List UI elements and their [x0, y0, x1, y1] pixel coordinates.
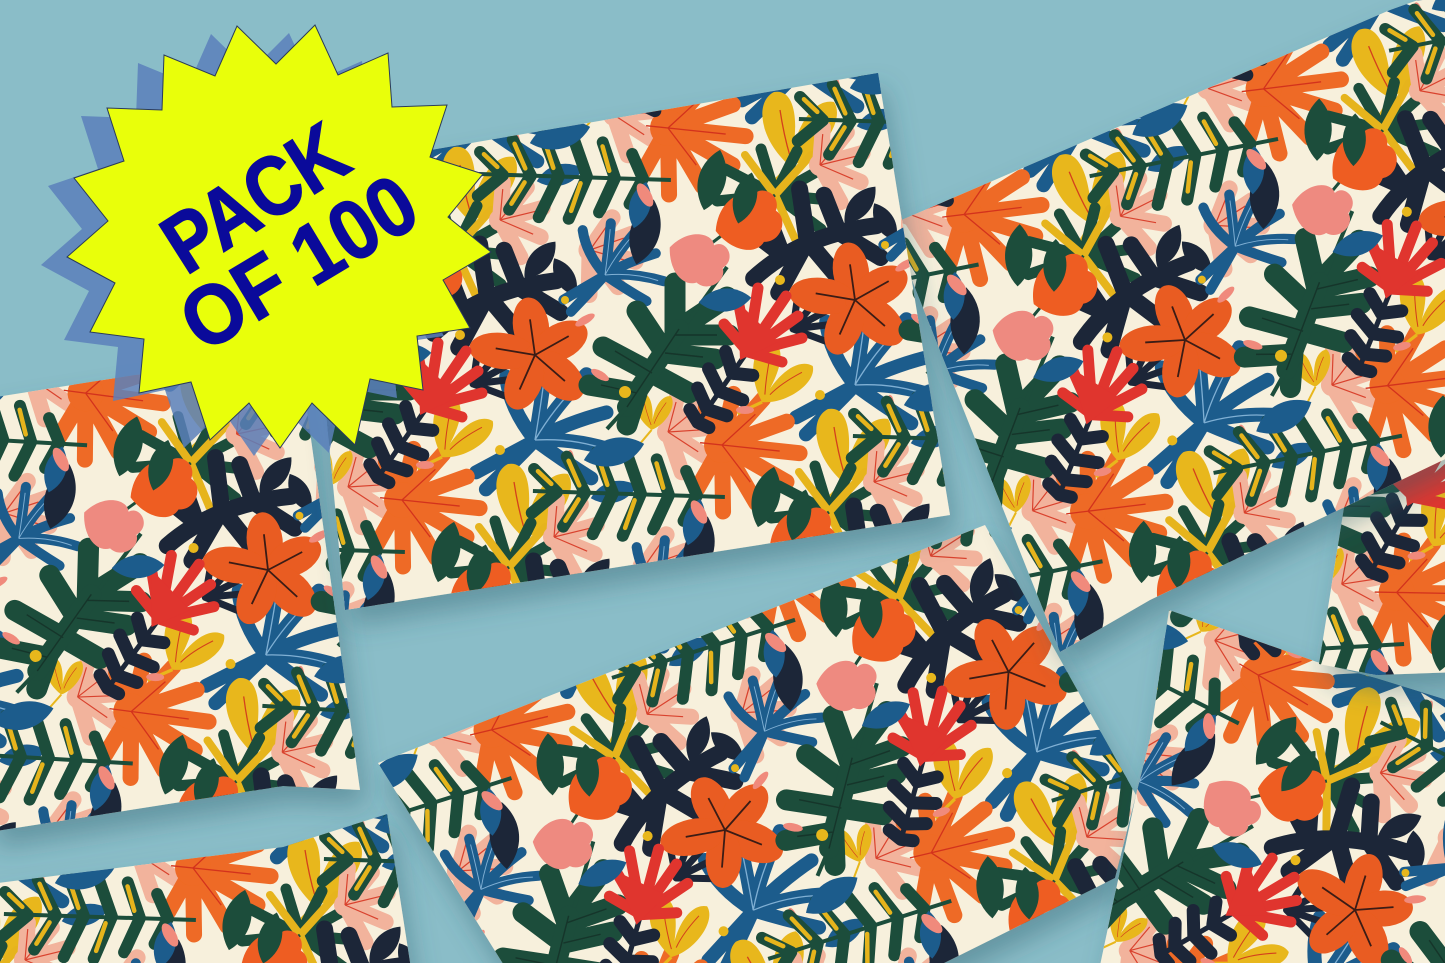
mailer: main centre: [321, 73, 966, 636]
mailer: middle right: [1310, 459, 1445, 708]
mailer: bottom left: [0, 814, 427, 963]
mailer: top right: [902, 0, 1445, 673]
mailer: bottom right: [1096, 610, 1445, 963]
badge shadow: [41, 33, 465, 456]
badge text: OF 100: [164, 156, 433, 369]
badge: pack of 100: [41, 25, 491, 456]
mailer: bottom centre: [378, 525, 1140, 963]
starburst: [67, 25, 491, 448]
mailer: left: [0, 374, 376, 858]
badge text: PACK: [145, 104, 364, 291]
